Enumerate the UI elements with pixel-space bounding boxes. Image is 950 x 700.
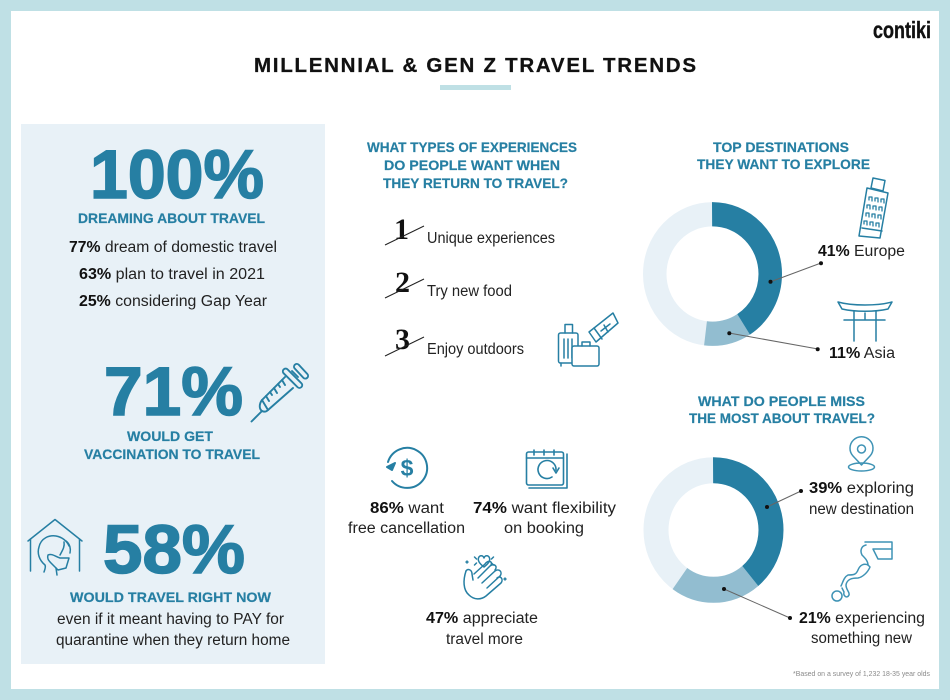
- heading: what people miss: THE MOST ABOUT TRAVEL?: [689, 410, 875, 426]
- icon: masked person at home: [28, 520, 82, 575]
- callout: exploring new destination: 39% exploring: [809, 480, 914, 497]
- benefit: free cancellation: [348, 448, 465, 537]
- heading: experiences: [367, 139, 577, 191]
- rank 1: Unique experiences: [427, 230, 555, 247]
- benefit: free cancellation: free cancellation: [348, 520, 465, 537]
- rank 2: [385, 266, 512, 300]
- stat: 100% dreaming: [69, 136, 277, 310]
- brand logo: contiki: [873, 17, 931, 43]
- benefit: flexible booking: 74% want flexibility: [473, 500, 616, 517]
- rank 1: [385, 213, 555, 247]
- stat: 71% vaccination: WOULD GET: [127, 428, 213, 444]
- segment: Asia 11%: [655, 214, 770, 334]
- rank 1: 1: [394, 213, 409, 246]
- callout: experiencing something new: 21% experiencing: [799, 610, 925, 627]
- rank 3: [385, 323, 524, 358]
- icon: syringe: [252, 363, 309, 422]
- heading: destinations: [697, 139, 870, 172]
- icon: hands and heart: [464, 556, 506, 599]
- panel: headline statistics: [21, 124, 325, 664]
- benefit: appreciate travel: travel more: [446, 631, 523, 648]
- stat: 71% vaccination: VACCINATION TO TRAVEL: [84, 446, 260, 462]
- heading: what people miss: WHAT DO PEOPLE MISS: [698, 393, 865, 409]
- icon: bungee jumper: [832, 542, 892, 601]
- callout: Europe: [768, 243, 905, 284]
- icon: refund dollar: $: [401, 455, 414, 481]
- icon: calendar: [526, 450, 567, 488]
- stat: 100% dreaming: 25% considering Gap Year: [79, 293, 267, 310]
- donut chart: destinations: [655, 214, 770, 334]
- stat: 100% dreaming: 100%: [90, 136, 264, 213]
- rank 2: 2: [395, 266, 410, 299]
- icon: map pin: [848, 437, 874, 471]
- heading: destinations: TOP DESTINATIONS: [713, 139, 849, 155]
- benefit: free cancellation: 86% want: [370, 500, 445, 517]
- stat: 58% travel now: 58%: [103, 511, 245, 588]
- callout: experiencing something new: [722, 587, 925, 647]
- icon: leaning tower: [859, 178, 888, 238]
- callout: experiencing something new: something new: [811, 630, 913, 647]
- stat: 100% dreaming: 77% dream of domestic travel: [69, 239, 277, 256]
- donut chart: what people miss: [656, 470, 771, 590]
- callout: exploring new destination: [765, 480, 914, 518]
- segment: something new 21%: [656, 470, 771, 590]
- icon: torii gate: [838, 302, 892, 341]
- rank 2: Try new food: [427, 283, 512, 300]
- rank 3: 3: [395, 323, 410, 356]
- benefit: appreciate travel: [426, 556, 538, 648]
- heading: what people miss: [689, 393, 875, 426]
- benefit: flexible booking: on booking: [504, 520, 584, 537]
- callout: Asia: [727, 331, 895, 362]
- stat: 71% vaccination: 71%: [104, 353, 243, 430]
- stat: 58% travel now: quarantine when they return home: [56, 632, 290, 649]
- title underline: [440, 85, 511, 90]
- benefit: appreciate travel: 47% appreciate: [426, 610, 538, 627]
- callout: exploring new destination: new destination: [809, 501, 914, 518]
- heading: destinations: THEY WANT TO EXPLORE: [697, 156, 870, 172]
- segment: new destination 39%: [656, 470, 771, 590]
- stat: 71% vaccination: [84, 353, 260, 462]
- icon: luggage and ticket: [558, 313, 618, 366]
- stat: 58% travel now: even if it meant having to PAY for: [57, 611, 284, 628]
- footnote: *Based on a survey of 1,232 18-35 year olds: [793, 669, 930, 678]
- heading: experiences: WHAT TYPES OF EXPERIENCES: [367, 139, 577, 155]
- heading: experiences: DO PEOPLE WANT WHEN: [384, 157, 560, 173]
- stat: 58% travel now: WOULD TRAVEL RIGHT NOW: [70, 589, 272, 605]
- stat: 100% dreaming: 63% plan to travel in 2021: [79, 266, 265, 283]
- rank 3: Enjoy outdoors: [427, 341, 524, 358]
- stat: 58% travel now: [56, 511, 290, 649]
- title: MILLENNIAL & GEN Z TRAVEL TRENDS: [254, 54, 696, 77]
- ranked list: [385, 213, 555, 358]
- heading: experiences: THEY RETURN TO TRAVEL?: [383, 175, 568, 191]
- callout: Asia: 11% Asia: [829, 345, 895, 362]
- benefit: flexible booking: [473, 450, 616, 537]
- stat: 100% dreaming: DREAMING ABOUT TRAVEL: [78, 210, 265, 226]
- segment: Europe 41%: [655, 214, 770, 334]
- callout: Europe: 41% Europe: [818, 243, 905, 260]
